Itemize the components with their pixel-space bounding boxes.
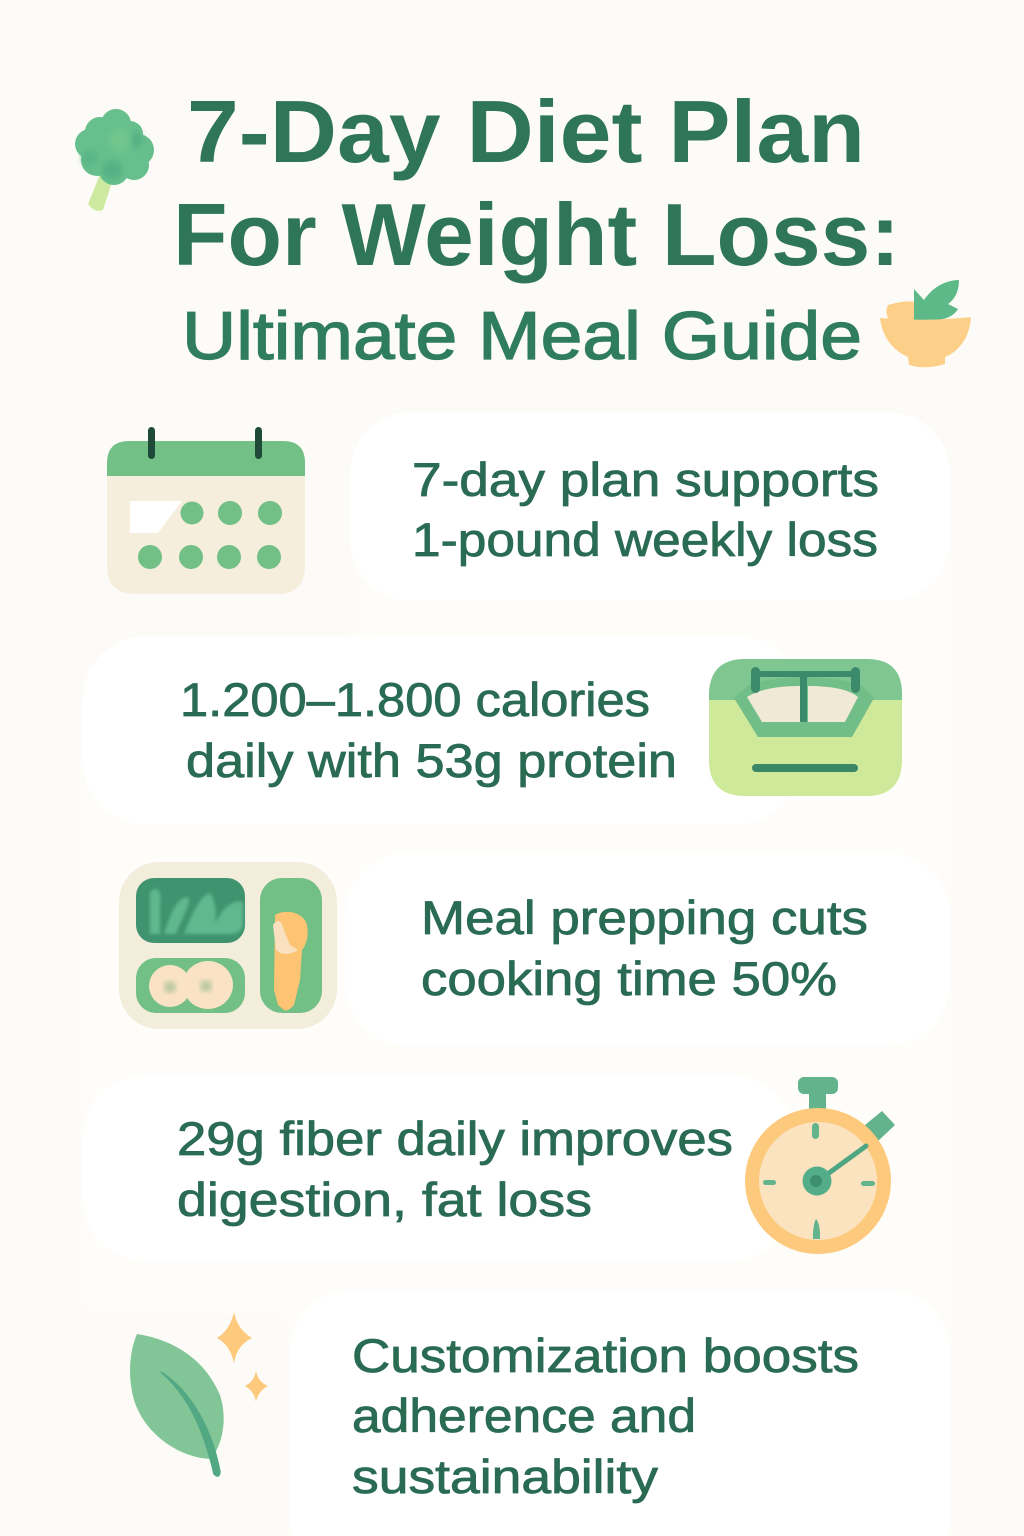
- text: weekly loss statement: 7-day plan supports: [412, 453, 879, 506]
- panel: fiber statement card: [83, 1075, 793, 1261]
- title: [173, 82, 900, 374]
- title: For Weight Loss:: [173, 185, 900, 284]
- text: meal prep statement: cooking time 50%: [421, 952, 837, 1005]
- text: customization statement: [352, 1329, 859, 1503]
- panel: calories statement card: [83, 636, 800, 824]
- text: calories statement: 1.200–1.800 calories: [180, 673, 650, 726]
- icon: stopwatch: [745, 1077, 895, 1254]
- text: customization statement: Customization boosts: [352, 1329, 859, 1382]
- text: fiber statement: 29g fiber daily improves: [177, 1112, 733, 1165]
- icon: leaf with sparkles: [130, 1312, 268, 1476]
- text: customization statement: sustainability: [352, 1450, 659, 1503]
- icon: calendar: [107, 427, 305, 594]
- text: calories statement: daily with 53g protein: [186, 734, 677, 787]
- text: meal prep statement: [421, 891, 868, 1005]
- icon: broccoli: [75, 109, 154, 211]
- icon: salad bowl: [880, 280, 971, 367]
- title: Ultimate Meal Guide: [182, 298, 862, 374]
- text: weekly loss statement: [412, 453, 879, 566]
- panel: customization statement card: [290, 1290, 950, 1536]
- text: customization statement: adherence and: [352, 1389, 696, 1442]
- title: 7-Day Diet Plan: [187, 82, 865, 181]
- icon: food scale: [709, 659, 902, 796]
- text: meal prep statement: Meal prepping cuts: [421, 891, 868, 944]
- panel: meal prep statement card: [345, 853, 950, 1045]
- text: fiber statement: digestion, fat loss: [177, 1173, 592, 1226]
- text: weekly loss statement: 1-pound weekly loss: [412, 513, 878, 566]
- icon: meal prep container: [119, 862, 337, 1029]
- panel: calendar statement card: [350, 412, 950, 601]
- text: fiber statement: [177, 1112, 733, 1226]
- text: calories statement: [180, 673, 677, 787]
